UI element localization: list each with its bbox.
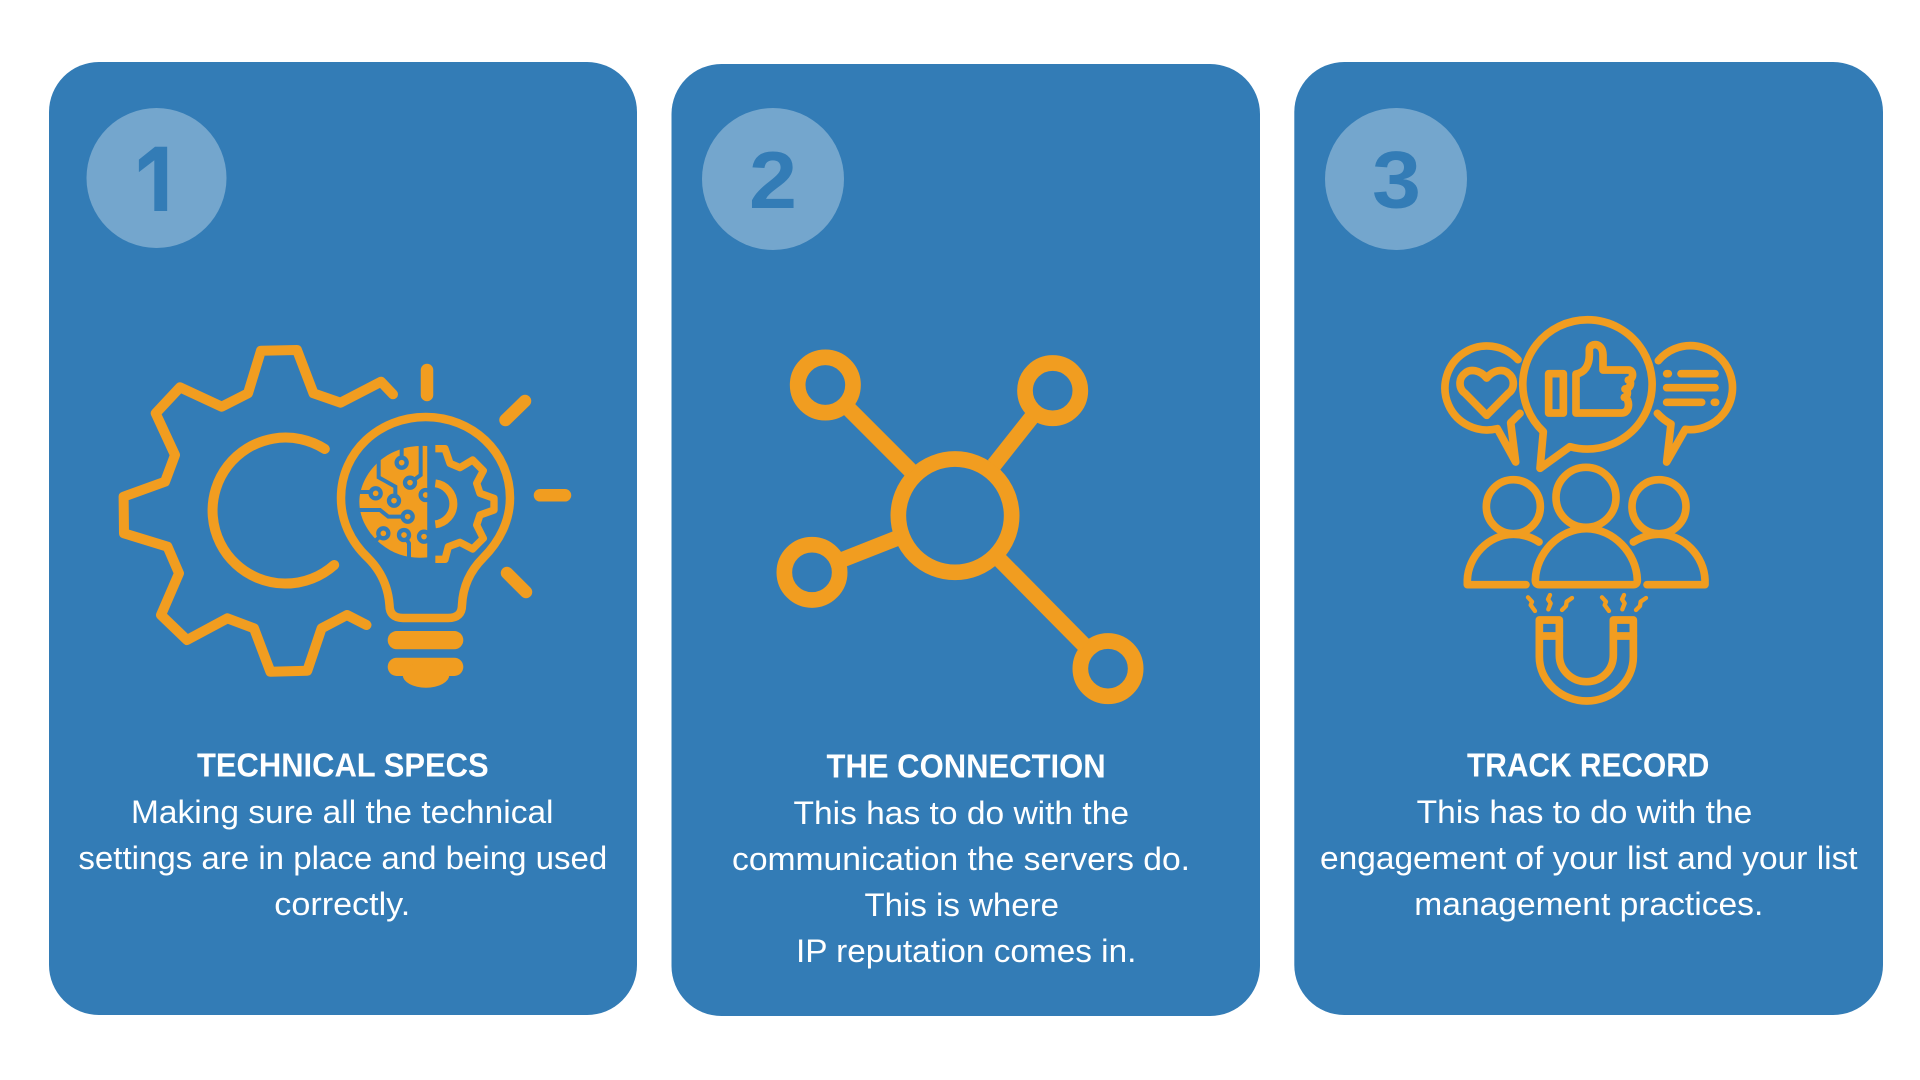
text block: the connection description: communication the servers do. xyxy=(732,841,1190,877)
icon: magnet xyxy=(1528,595,1646,701)
card background 3 xyxy=(1294,62,1883,1015)
text block: the connection description: This has to do with the xyxy=(794,795,1129,831)
number badge 1 xyxy=(86,108,226,251)
text block: technical specs description: correctly. xyxy=(274,886,410,922)
number badge 2 xyxy=(702,108,844,250)
icon: large gear xyxy=(124,350,393,672)
heading: track record: TRACK RECORD xyxy=(1467,746,1709,784)
icon: light bulb outline xyxy=(341,417,510,618)
card background 2 xyxy=(672,64,1260,1016)
text block: technical specs description: settings are in place and being used xyxy=(78,840,607,876)
text block: technical specs description xyxy=(78,794,607,922)
icon: text speech bubble xyxy=(1657,346,1733,462)
number badge 2: 2 xyxy=(749,136,797,226)
text block: track record description: management practices. xyxy=(1414,886,1763,922)
panel: technical specs xyxy=(49,62,637,1015)
icon: thumbs up speech bubble xyxy=(1523,320,1652,468)
icon: audience with speech bubbles and magnet xyxy=(1445,320,1733,701)
text block: technical specs description: Making sure all the technical xyxy=(131,794,554,830)
heading: the connection: THE CONNECTION xyxy=(826,748,1106,784)
text block: the connection description: IP reputation comes in. xyxy=(796,933,1136,969)
text block: track record description xyxy=(1320,794,1858,922)
icon: light rays xyxy=(427,370,565,592)
text block: track record description: engagement of your list and your list xyxy=(1320,840,1858,876)
number badge 3 xyxy=(1325,108,1467,250)
icon: gear and light bulb xyxy=(124,350,565,688)
icon: circuit brain and half gear xyxy=(358,443,494,563)
text block: track record description: This has to do with the xyxy=(1417,794,1752,830)
icon: bulb base xyxy=(388,631,463,688)
number badge 1: 1 xyxy=(132,123,184,251)
icon: heart speech bubble xyxy=(1445,346,1520,462)
heading: technical specs: TECHNICAL SPECS xyxy=(197,746,489,784)
panel: the connection xyxy=(672,64,1260,1016)
card background 1 xyxy=(49,62,637,1015)
icon: network hub xyxy=(784,357,1136,696)
text block: the connection description: This is where xyxy=(864,887,1059,923)
number badge 3: 3 xyxy=(1372,136,1421,226)
icon: three people xyxy=(1467,467,1705,585)
text block: the connection description xyxy=(732,795,1190,969)
panel: track record xyxy=(1294,62,1883,1015)
